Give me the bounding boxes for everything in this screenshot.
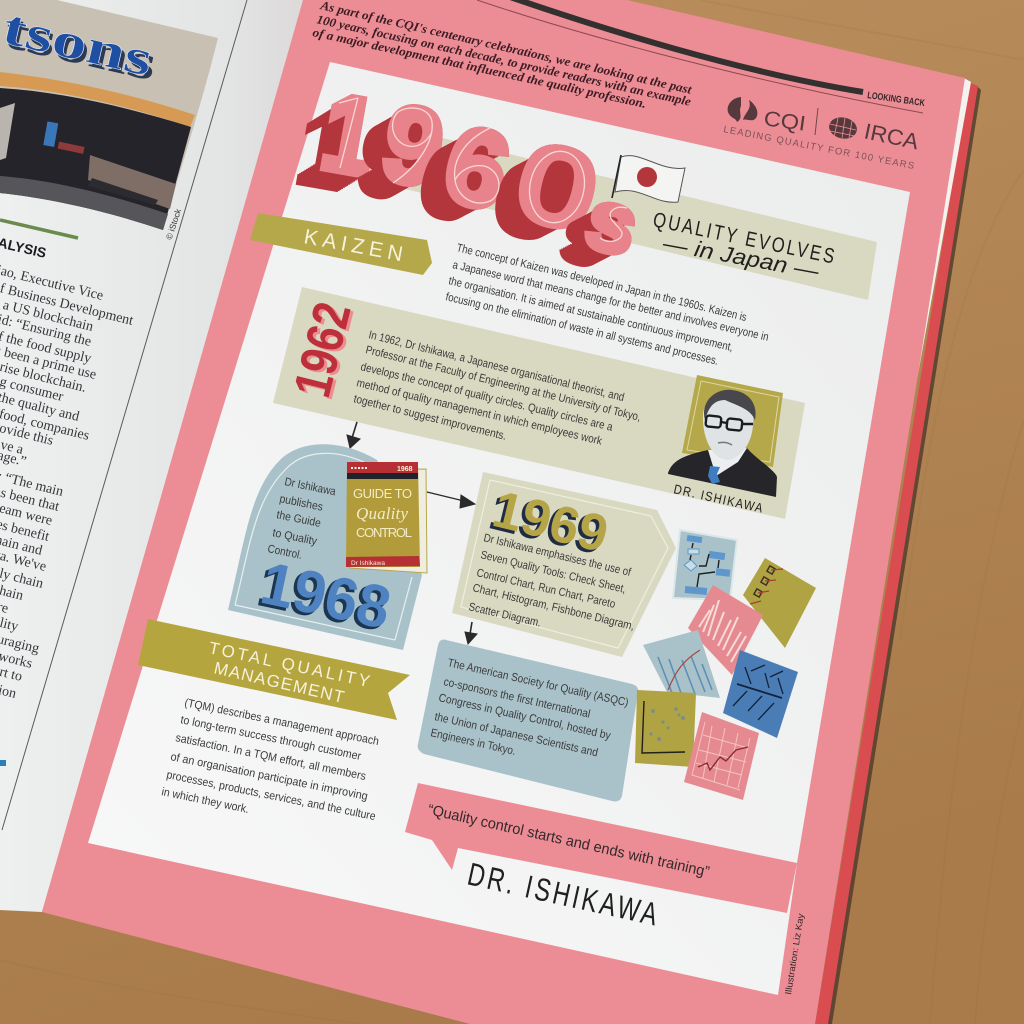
total quality management ribbon	[138, 619, 410, 720]
1962 text: Professor at the Faculty of Engineering at the University of Tokyo,	[364, 344, 642, 424]
banner heading: QUALITY EVOLVES	[651, 208, 839, 269]
arrow: 1962 to 1968	[347, 422, 360, 448]
1962 year: 1962	[286, 299, 366, 405]
icon: IRCA globe	[827, 115, 859, 141]
book: Guide to Quality Control: Dr Ishikawa	[351, 560, 385, 567]
title: 1960s: 6	[433, 102, 521, 233]
left page store photo	[0, 0, 218, 241]
title: 1960s: 1	[313, 70, 385, 199]
TQM text: in which they work.	[160, 786, 250, 816]
illustration credit: Illustration: Liz Kay	[783, 912, 806, 995]
panel: 1968 arch	[228, 444, 422, 650]
TQM text: processes, products, services, and the culture	[165, 769, 377, 823]
portrait caption: DR. ISHIKAWA	[672, 481, 765, 516]
left page store photo: © iStock	[164, 207, 183, 241]
arrow: 1968 to 1969	[427, 492, 475, 508]
black header rule	[477, 0, 923, 113]
title: 1960s: 0	[506, 119, 608, 254]
1968 text	[266, 476, 337, 562]
1962 text: In 1962, Dr Ishikawa, a Japanese organisational theorist, and	[367, 329, 625, 404]
panel: 1962	[273, 287, 805, 519]
white content panel	[88, 62, 910, 995]
banner heading: — in Japan —	[660, 230, 822, 284]
1968 text: Control.	[266, 543, 303, 562]
1969 year: 1969	[487, 480, 614, 564]
title: 1960s: 9	[373, 80, 454, 211]
1969 text	[467, 532, 635, 633]
book: Guide to Quality Control: GUIDE TO	[353, 486, 412, 501]
panel: 1969	[452, 472, 676, 657]
quote bubble: “Quality control starts and ends with training”	[426, 801, 711, 881]
1962 text: develops the concept of quality circles. Quality circles are a	[359, 361, 614, 434]
1968 text: to Quality	[271, 527, 318, 548]
icon: flowchart	[673, 530, 737, 600]
kaizen ribbon: KAIZEN	[302, 225, 405, 266]
icon: scatter diagram	[635, 690, 696, 767]
TQM text: satisfaction. In a TQM effort, all members	[174, 732, 367, 783]
logo divider	[815, 108, 818, 135]
book: Guide to Quality Control: CONTROL	[356, 525, 412, 540]
TQM text: of an organisation participate in improving	[169, 751, 369, 803]
icon: run chart	[643, 630, 720, 698]
panel: ASQC congress: the Union of Japanese Scientists and	[433, 711, 599, 759]
panel: ASQC congress	[418, 640, 638, 801]
left magazine page	[0, 0, 305, 912]
quote bubble	[405, 783, 797, 913]
title: 1960s: s	[578, 171, 646, 273]
quality evolves banner	[352, 135, 877, 300]
1968 year: 1968	[255, 549, 396, 642]
1968 text: publishes	[278, 493, 324, 514]
1969 text: Scatter Diagram.	[467, 601, 542, 630]
title: 1960s: s	[578, 171, 646, 273]
TQM text	[160, 697, 380, 823]
introduction text: of a major development that influenced the quality profession.	[311, 25, 648, 111]
CQI wordmark: CQI	[762, 107, 807, 136]
introduction text: As part of the CQI's centenary celebrations, we are looking at the past	[318, 0, 693, 97]
portrait: Dr Ishikawa	[668, 375, 783, 516]
CQI and IRCA logo	[722, 97, 921, 172]
book: Guide to Quality Control	[346, 462, 427, 573]
arrow: 1969 to ASQC	[465, 622, 477, 644]
icon: control chart	[684, 712, 759, 800]
1969 year: 1969	[484, 482, 611, 566]
total quality management ribbon: TOTAL QUALITY	[207, 638, 372, 691]
1969 text: Seven Quality Tools: Check Sheet,	[479, 549, 627, 596]
TQM text: to long-term success through customer	[179, 714, 362, 763]
left page article column	[0, 220, 135, 766]
panel: ASQC congress: Engineers in Tokyo.	[429, 727, 517, 758]
1962 text	[352, 329, 642, 448]
quote attribution: DR. ISHIKAWA	[464, 856, 664, 933]
1969 text: Chart, Histogram, Fishbone Diagram,	[471, 582, 635, 633]
book: Guide to Quality Control: Quality	[356, 504, 408, 523]
1968 year: 1968	[252, 551, 393, 644]
title: 1960s: 6	[433, 102, 521, 233]
1968 text: Dr Ishikawa	[283, 476, 337, 498]
panel: ASQC congress: co-sponsors the first International	[442, 676, 591, 721]
icon: check sheet	[743, 558, 816, 648]
stacked page edges	[815, 78, 981, 1024]
TQM text: (TQM) describes a management approach	[183, 697, 380, 748]
panel: ASQC congress: Congress in Quality Control, hosted by	[437, 692, 612, 742]
1968 text: the Guide	[275, 509, 322, 530]
icon: fishbone diagram	[723, 650, 798, 738]
title: 1960s: 0	[506, 119, 608, 254]
tagline: LEADING QUALITY FOR 100 YEARS	[722, 124, 915, 172]
left page store photo: tsons	[0, 2, 162, 91]
looking back section label: LOOKING BACK	[867, 90, 926, 109]
book: Guide to Quality Control: 1968	[397, 466, 413, 473]
kaizen text: The concept of Kaizen was developed in Japan in the 1960s. Kaizen is	[455, 242, 748, 324]
icon: Japanese flag	[612, 155, 685, 202]
panel: ASQC congress: The American Society for Quality (ASQC)	[446, 657, 630, 709]
icon: pareto chart	[688, 585, 763, 675]
kaizen text: focusing on the elimination of waste in all systems and processes.	[444, 291, 719, 368]
1962 year: 1962	[283, 297, 363, 403]
1962 text: method of quality management in which employees work	[355, 377, 603, 448]
title: 1960s: 1	[313, 70, 385, 199]
1962 text: together to suggest improvements.	[352, 393, 508, 443]
icon: CQI leaves	[728, 97, 757, 122]
kaizen text	[444, 242, 770, 368]
kaizen ribbon	[250, 213, 432, 275]
1969 text: Control Chart, Run Chart, Pareto	[475, 567, 616, 611]
title: 1960s: 9	[373, 80, 454, 211]
IRCA wordmark: IRCA	[862, 118, 921, 154]
1960s digit counters	[395, 111, 581, 222]
total quality management ribbon: MANAGEMENT	[212, 658, 346, 707]
1969 text: Dr Ishikawa emphasises the use of	[482, 532, 633, 579]
introduction text: 100 years, focusing on each decade, to provide readers with an example	[315, 12, 693, 109]
kaizen text: a Japanese word that means change for the better and involves everyone in	[451, 259, 770, 344]
kaizen text: the organisation. It is aimed at sustainable continuous improvement,	[447, 275, 734, 354]
